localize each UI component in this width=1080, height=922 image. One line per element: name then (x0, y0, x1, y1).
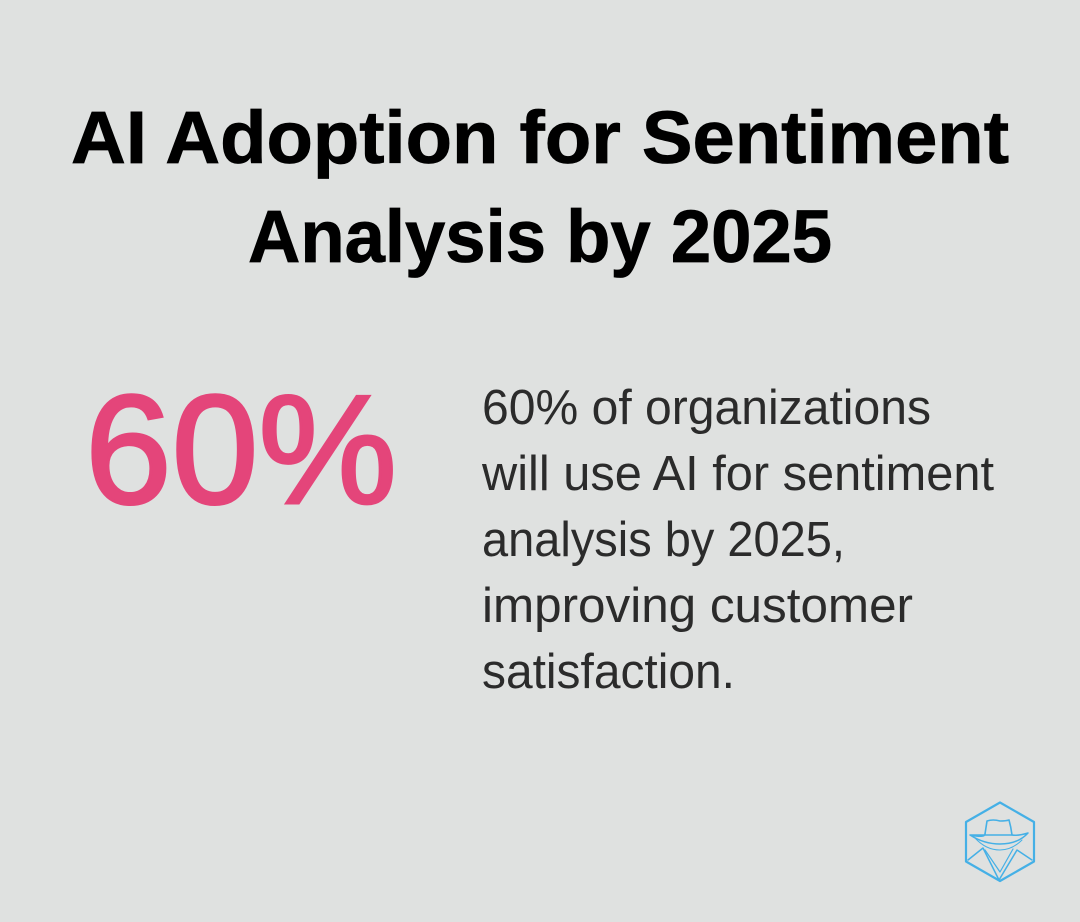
description text: improving customer (482, 579, 913, 633)
title: AI Adoption for Sentiment (71, 96, 1009, 179)
title: Analysis by 2025 (248, 195, 832, 278)
description text: satisfaction. (482, 645, 735, 699)
icon: hexagon logo with detective hat (966, 802, 1034, 881)
description text: 60% of organizations (482, 381, 931, 435)
title (71, 96, 1009, 278)
description text: will use AI for sentiment (481, 447, 994, 501)
description text: analysis by 2025, (482, 513, 845, 567)
description text (481, 381, 994, 699)
big statistic: 60%: 60% (85, 363, 397, 536)
